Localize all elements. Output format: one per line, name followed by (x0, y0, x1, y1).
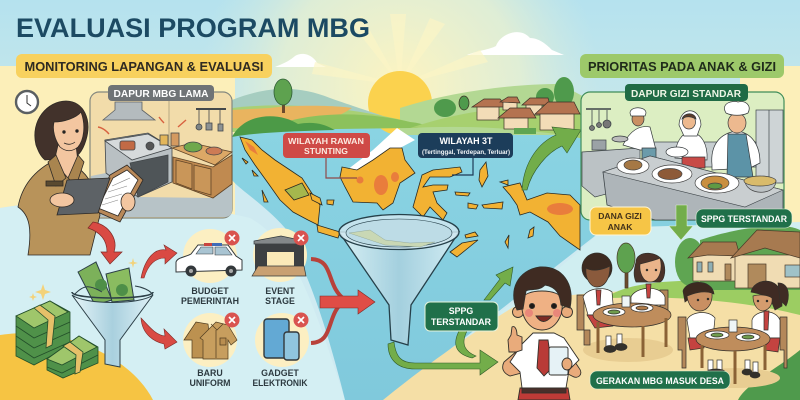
label: sppg terstandar: TERSTANDAR (431, 317, 492, 327)
boy thumb (508, 327, 522, 352)
hanging utensils and pantry items (160, 109, 226, 155)
label: dana gizi anak: ANAK (608, 222, 633, 232)
arrow: funnel to uniform and gadgets (141, 318, 177, 349)
section header: monitoring: MONITORING LAPANGAN & EVALUASI (24, 59, 264, 74)
arrow: green down to village (669, 205, 693, 240)
boy arms (503, 340, 581, 377)
glass of milk (549, 347, 568, 375)
boy belt (522, 388, 566, 393)
boy trousers (518, 388, 570, 400)
illustration: big glass funnel (339, 214, 459, 345)
child fourth (752, 312, 780, 338)
label: sppg terstandar (425, 302, 498, 331)
small islands (242, 158, 534, 248)
label: baru uniform: BARU (197, 368, 223, 378)
map: indonesia islands (240, 128, 580, 257)
icon: wall clock (16, 91, 38, 113)
item: electronic gadgets (255, 313, 309, 367)
arrow: green curve to child (388, 342, 498, 375)
plates of food (617, 158, 776, 193)
arrow: green to kitchen (522, 127, 581, 190)
child left (583, 289, 614, 315)
title: EVALUASI PROGRAM MBG (16, 13, 370, 43)
background: pale right band (740, 66, 800, 225)
counter and cabinets (172, 143, 232, 198)
section header: priorities: PRIORITAS PADA ANAK & GIZI (588, 59, 776, 74)
papua hotspot (547, 203, 573, 215)
range hood (103, 102, 155, 120)
panel: old kitchen (90, 92, 232, 218)
icon: reject mark (294, 230, 308, 246)
label: gadget elektronik: GADGET (261, 368, 299, 378)
item: event stage (252, 228, 307, 282)
label: dapur gizi standar (625, 84, 748, 101)
island: kalimantan (340, 148, 415, 210)
scene: bush corner (738, 350, 800, 400)
label: dapur mbg lama (108, 85, 214, 101)
arrow: green up right (484, 267, 513, 300)
item: budget pemerintah car (176, 229, 242, 283)
label: event stage: STAGE (265, 296, 295, 306)
arrows on kitchen (98, 117, 186, 134)
hills and fields (232, 84, 590, 140)
callout: wilayah 3t (418, 133, 513, 175)
callout: wilayah 3t: WILAYAH 3T (440, 136, 493, 146)
label: gerakan mbg masuk desa: GERAKAN MBG MASUK DESA (596, 376, 724, 386)
background: pale shore (500, 222, 800, 335)
callout: wilayah rawan stunting (283, 133, 370, 178)
label: budget pemerintah (181, 286, 239, 306)
sumatra green district (285, 183, 309, 200)
illustration: money stacks (16, 301, 98, 378)
label: gadget elektronik (252, 368, 308, 388)
label: event stage (265, 286, 295, 306)
scene: village (610, 226, 800, 315)
background: sky (0, 0, 800, 130)
island: sulawesi (413, 167, 462, 220)
child right (631, 288, 665, 305)
back counter and fridge (582, 110, 783, 197)
background: yellow hill bottom left (0, 333, 153, 400)
boy head (512, 291, 572, 330)
label: baru uniform (189, 368, 231, 388)
kalimantan hotspots (356, 172, 399, 195)
sun rays (312, 14, 488, 85)
island: nusa tenggara (450, 232, 478, 257)
arrow: small green curve (456, 331, 476, 358)
child third (687, 312, 715, 338)
label: gadget elektronik: ELEKTRONIK (252, 378, 308, 388)
counter top (603, 156, 783, 207)
illustration: table group right (678, 281, 788, 388)
section header: priorities (580, 54, 784, 78)
background: sea (232, 125, 800, 400)
label: budget pemerintah: BUDGET (191, 286, 229, 296)
main chef (712, 101, 760, 177)
label: event stage: EVENT (265, 286, 295, 296)
tree on hill (274, 79, 292, 113)
chef at back (612, 108, 656, 160)
label: sppg terstandar: SPPG (449, 306, 473, 316)
stove and oven (105, 133, 172, 197)
callout: wilayah 3t: (Tertinggal, Terdepan, Terluar) (422, 149, 510, 156)
island: maluku (455, 162, 503, 209)
arrow: officer to funnel (88, 222, 122, 264)
illustration: boy with thumbs up and milk (503, 267, 581, 400)
callout: wilayah rawan stunting: STUNTING (304, 146, 348, 156)
item: uniform (183, 313, 237, 367)
panel: standard nutrition kitchen (581, 92, 784, 220)
sumatra hotspot (245, 141, 258, 155)
hanging utensils (586, 109, 611, 130)
background: pale yellow left band (0, 66, 235, 215)
icon: reject mark (224, 230, 240, 246)
chef in hijab (666, 111, 707, 168)
icon: reject mark (294, 312, 308, 328)
island: sumatra (240, 137, 320, 225)
icon: reject mark (224, 312, 240, 328)
label: sppg terstandar top (696, 209, 792, 228)
label: dapur mbg lama: DAPUR MBG LAMA (114, 89, 208, 100)
arrow: merged red flow into big funnel (311, 259, 375, 343)
illustration: officer with tablet (18, 101, 143, 255)
illustration: money into funnel and small funnel (72, 262, 153, 367)
background: sand (383, 291, 800, 400)
island: kalimantan north (347, 128, 415, 170)
label: dapur gizi standar: DAPUR GIZI STANDAR (631, 88, 741, 100)
sun (368, 71, 432, 135)
boy hair (514, 267, 571, 310)
village houses (434, 77, 580, 134)
boy tie (537, 340, 552, 376)
illustration: table group left (577, 253, 673, 362)
label: dana gizi anak: DANA GIZI (598, 211, 642, 221)
label: baru uniform: UNIFORM (189, 378, 231, 388)
label: sppg terstandar top: SPPG TERSTANDAR (701, 214, 788, 224)
label: gerakan mbg masuk desa (590, 371, 730, 389)
background: light blue lower left (0, 202, 345, 400)
island: papua (503, 183, 580, 250)
island: java tail of sumatra (317, 225, 340, 238)
section header: monitoring (16, 54, 272, 78)
boy face (525, 303, 561, 322)
label: dana gizi anak (590, 207, 651, 235)
arrow: funnel to budget items (141, 245, 177, 278)
icon: sparkles (29, 258, 138, 301)
serving counter (603, 156, 783, 220)
boy shirt (510, 333, 579, 388)
callout: wilayah rawan stunting: WILAYAH RAWAN (288, 136, 364, 146)
background: clouds (275, 32, 564, 67)
label: budget pemerintah: PEMERINTAH (181, 296, 239, 306)
background: sun glow (200, 0, 600, 130)
